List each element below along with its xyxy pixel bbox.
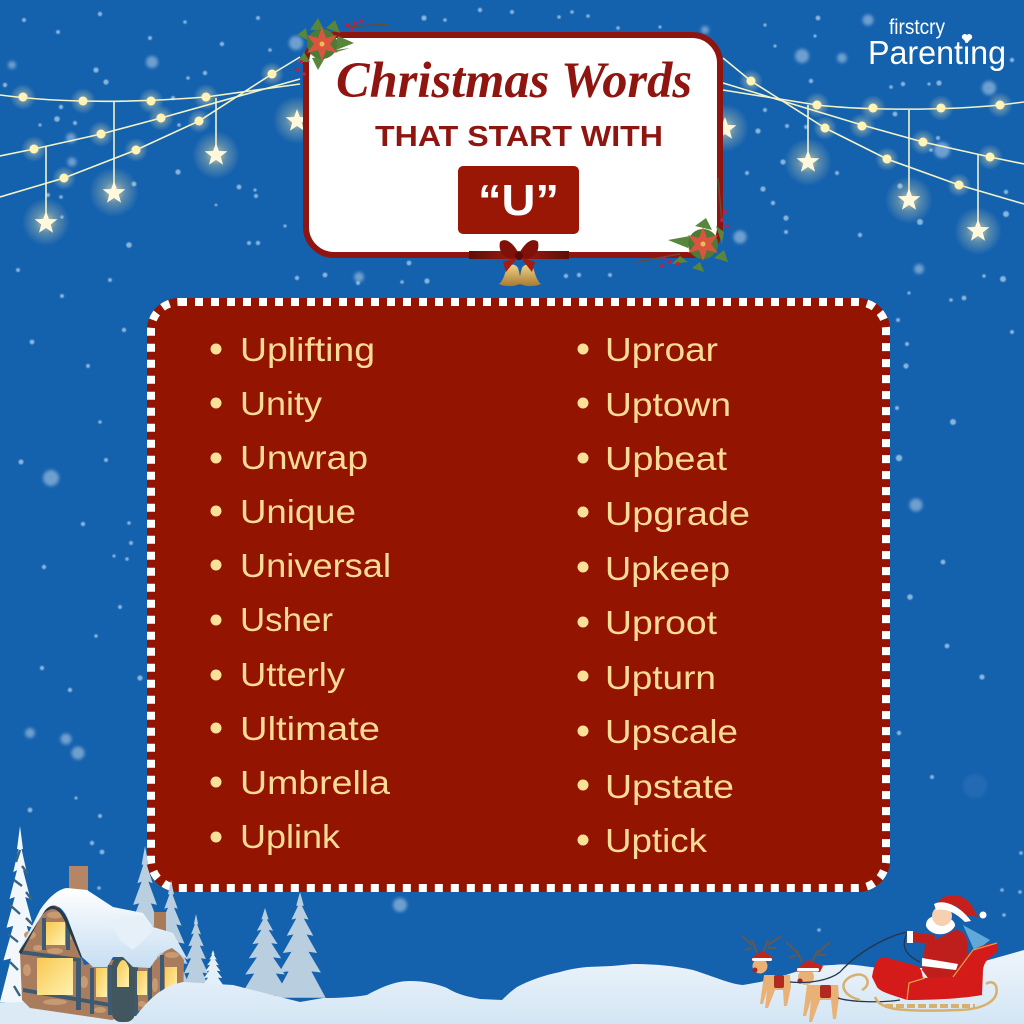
timber frame: [20, 912, 164, 1015]
sleigh runners: [844, 975, 997, 1011]
letter badge: “U”: [478, 176, 559, 225]
stone walls: [20, 905, 184, 1020]
bullets: right: [578, 344, 588, 846]
decoration: top-left poinsettia: [296, 18, 388, 76]
snow foreground hills: [133, 950, 1024, 1024]
gable arch: [20, 907, 82, 957]
cottage door: [112, 957, 135, 1022]
snow on roof shading: [110, 916, 152, 950]
heading: Christmas Words: Christmas Words: [336, 53, 692, 109]
letter badge: [458, 166, 579, 234]
list: left column: Utterly: [240, 656, 346, 693]
snowy roof: [20, 888, 188, 968]
decoration: bottom-right poinsettia: [636, 178, 729, 272]
list: left column: Unwrap: [240, 439, 368, 476]
list: right column: Uproot: [605, 604, 717, 641]
list: left column: Uplink: [240, 818, 341, 855]
list: left column: [210, 331, 391, 855]
list: right column: Uptick: [605, 822, 708, 859]
logo heart: [962, 34, 972, 43]
pale background fir trees: [122, 846, 326, 998]
decoration: bow and bells: [469, 240, 569, 286]
stone texture: [23, 912, 179, 1013]
list: right column: Uptown: [605, 386, 731, 423]
subheading: THAT START WITH: [375, 121, 663, 153]
list: left column: Umbrella: [240, 764, 391, 801]
santa with sleigh and reindeer: [742, 895, 998, 1022]
list: right column: Uproar: [605, 331, 718, 368]
snowy fir tree: left: [0, 826, 40, 1003]
reindeer: front right: [786, 942, 839, 1022]
bullets: left: [210, 344, 222, 842]
snow ground: [0, 1002, 1024, 1024]
list: left column: Usher: [240, 601, 333, 638]
left light strings: [0, 57, 300, 222]
list: left column: Unity: [240, 385, 323, 422]
list: right column: Upscale: [605, 713, 738, 750]
logo wordmark large: Parenting: [868, 34, 1006, 71]
windows: [37, 922, 177, 997]
right hanging stars: [714, 117, 989, 241]
list: right column: Upturn: [605, 659, 716, 696]
list: right column: [578, 331, 750, 859]
logo wordmark small: firstcry: [889, 16, 945, 39]
right light strings: [723, 58, 1024, 231]
title card frame: [306, 35, 720, 255]
list: left column: Ultimate: [240, 710, 380, 747]
left bulb glows: [10, 62, 321, 246]
list: left column: Unique: [240, 493, 356, 530]
santa body: [907, 895, 986, 978]
left bulbs: [18, 70, 276, 182]
left hanging stars: [35, 109, 308, 233]
list: right column: Upstate: [605, 768, 734, 805]
right bulbs: [746, 76, 1004, 190]
title card: [306, 35, 720, 255]
list: right column: Upgrade: [605, 495, 750, 532]
list: left column: Universal: [240, 547, 391, 584]
chimneys: [69, 866, 88, 892]
red sleigh: [872, 943, 998, 1000]
list: right column: Upkeep: [605, 550, 730, 587]
right bulb glows: [701, 69, 1013, 255]
reindeer: front left: [742, 936, 791, 1008]
white small fir tree: [202, 950, 224, 987]
fairy lights: right: [701, 58, 1024, 255]
cottage: [20, 866, 188, 1022]
panel: word list: [151, 302, 886, 888]
reins: [790, 932, 920, 983]
fairy lights: left: [0, 57, 321, 246]
logo: FirstCry Parenting: [868, 16, 1006, 71]
panel candy-cane border: [151, 302, 886, 888]
sack: [963, 925, 990, 952]
list: right column: Upbeat: [605, 440, 727, 477]
panel background: [151, 302, 886, 888]
list: left column: Uplifting: [240, 331, 375, 368]
